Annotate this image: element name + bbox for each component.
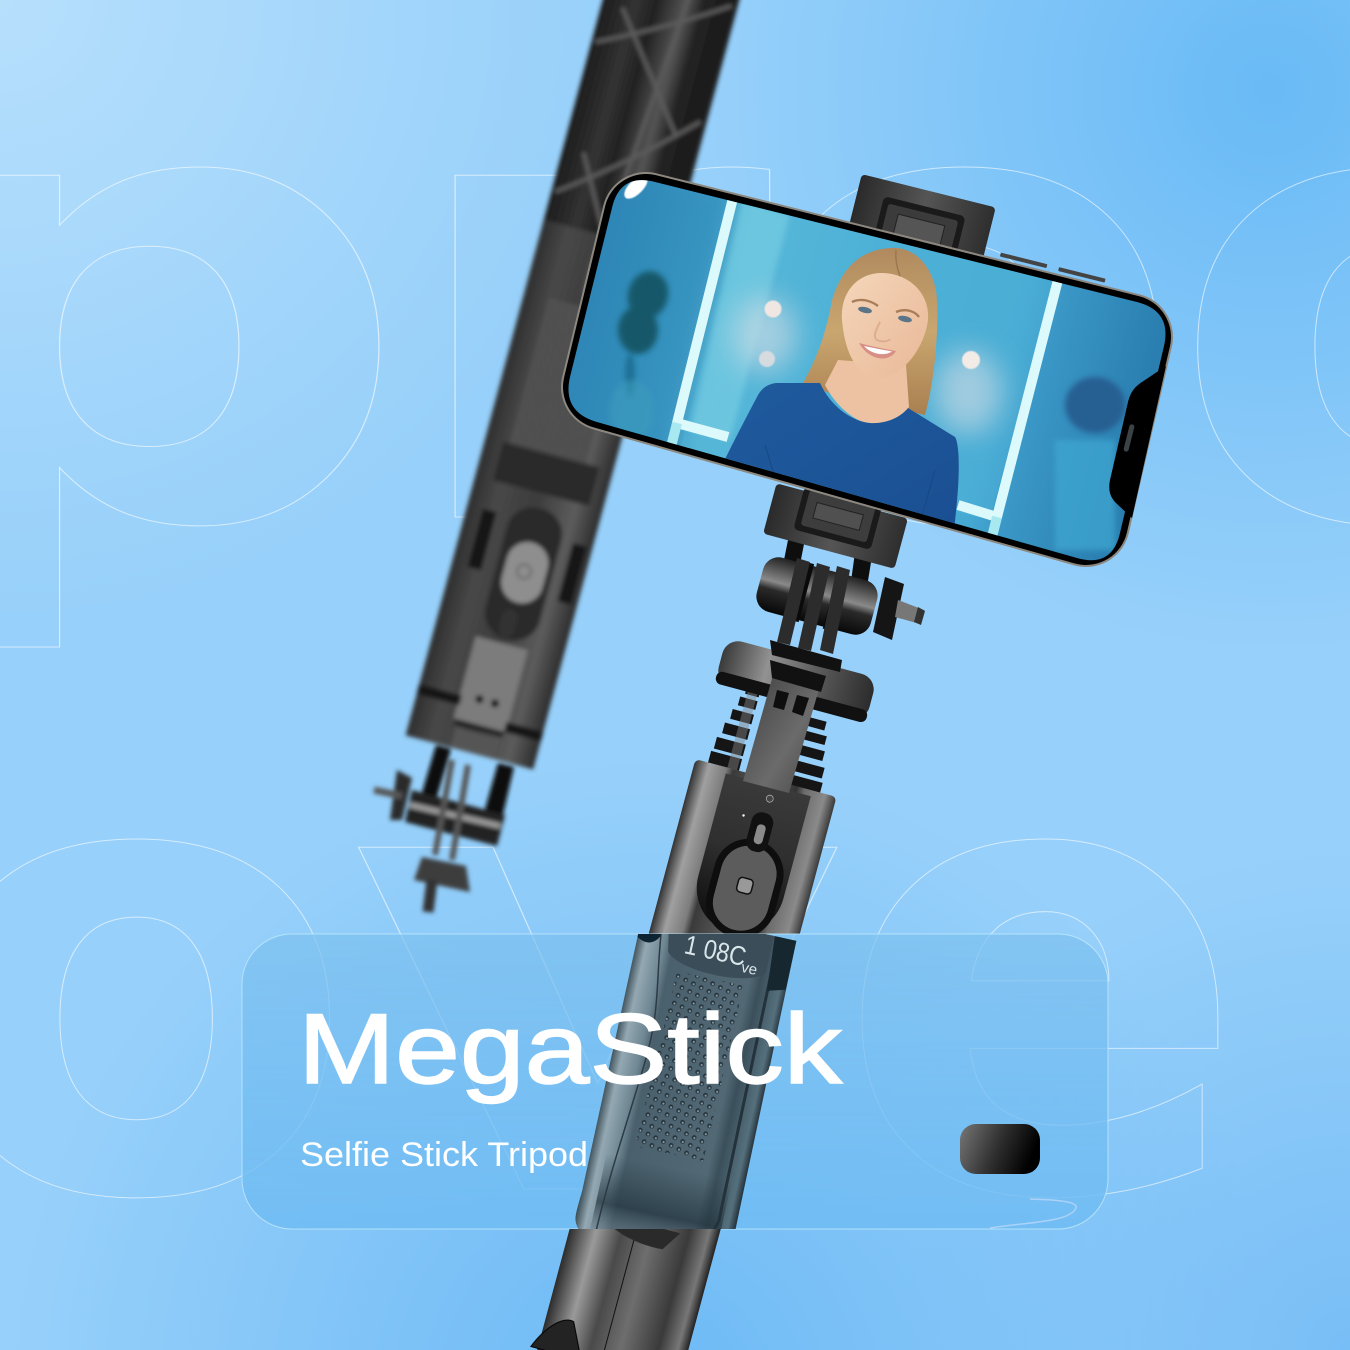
- hair parting: [896, 250, 900, 276]
- spring hinge rungs: [708, 691, 827, 792]
- metal cylinder body: [648, 760, 836, 934]
- clamp arms: [774, 530, 873, 630]
- nose: [875, 322, 890, 341]
- display side hollow: [638, 934, 660, 942]
- giant outlined background lettering: v: [347, 610, 848, 1337]
- product subtitle: Selfie Stick Tripod: [300, 1136, 588, 1174]
- dark gradient button pill: [960, 1124, 1040, 1174]
- panel swoosh highlight: [990, 1199, 1076, 1228]
- eyes and brows: [852, 300, 919, 323]
- grip centre ridge right: [713, 936, 780, 1229]
- back stick handle: [406, 220, 671, 770]
- round mount plate and fork: [714, 558, 877, 793]
- product title: MegaStick: [298, 993, 843, 1104]
- hair: [803, 248, 937, 415]
- face: [842, 273, 928, 365]
- woman smiling: [726, 248, 959, 524]
- studio backdrop: [568, 180, 1166, 560]
- blurred right plant: [1055, 377, 1125, 550]
- top LED display housing: [668, 934, 774, 978]
- plate: [714, 638, 877, 723]
- smartphone: [561, 172, 1173, 567]
- back stick lattice tube: [537, 0, 750, 278]
- speaker dot grid: [635, 970, 744, 1162]
- back stick phone mount: [374, 745, 514, 912]
- grip centre ridge left: [596, 934, 662, 1229]
- shirt sleeve crease: [764, 445, 936, 514]
- back stick bracket: [406, 625, 563, 770]
- control recess: [696, 774, 811, 922]
- back stick buttons: [479, 501, 568, 646]
- ribbed knob left: [531, 1312, 590, 1350]
- phone side buttons: [1000, 253, 1106, 283]
- slider switch: [742, 794, 774, 852]
- phone notch: [1109, 366, 1166, 518]
- bracket windows: [773, 690, 809, 716]
- LED display digits: 1 08C: [682, 930, 749, 972]
- tube collar: [614, 1229, 680, 1250]
- phone screen: selfie video: [568, 180, 1166, 560]
- lower telescopic tube: [530, 1229, 721, 1350]
- blurred plant: [614, 268, 672, 436]
- bottom clamp: [763, 479, 909, 569]
- bracket hinge top: [770, 660, 826, 692]
- shutter button: [706, 838, 784, 934]
- smile: [859, 343, 896, 358]
- knuckle block: [752, 552, 882, 640]
- tube seam: [604, 1240, 634, 1350]
- tube: [537, 1229, 721, 1350]
- grip lower shade: [590, 1158, 729, 1229]
- top clamp: [847, 174, 996, 268]
- right side notch: [767, 936, 796, 991]
- three prong fork: [770, 558, 850, 672]
- neck: [825, 360, 909, 424]
- blurred background selfie stick: [374, 0, 750, 912]
- phone body: [605, 216, 1129, 523]
- LED display unit: ve: [740, 959, 759, 979]
- bokeh lights: [733, 297, 1002, 434]
- giant outlined background lettering: e: [836, 610, 1247, 1337]
- screen glare: [624, 180, 648, 200]
- frosted glass panel: [242, 934, 1108, 1229]
- bracket arm: [743, 668, 821, 793]
- blue shirt: [726, 383, 959, 524]
- neon light frames: [667, 200, 1062, 536]
- selfie stick body with buttons: [648, 691, 836, 934]
- handle grip seen through panel: [576, 934, 796, 1229]
- black knuckle joint and thumb bolt: [752, 530, 925, 640]
- thumb bolt: [873, 577, 925, 640]
- grip body: [576, 934, 796, 1229]
- phone clamps: [763, 174, 996, 569]
